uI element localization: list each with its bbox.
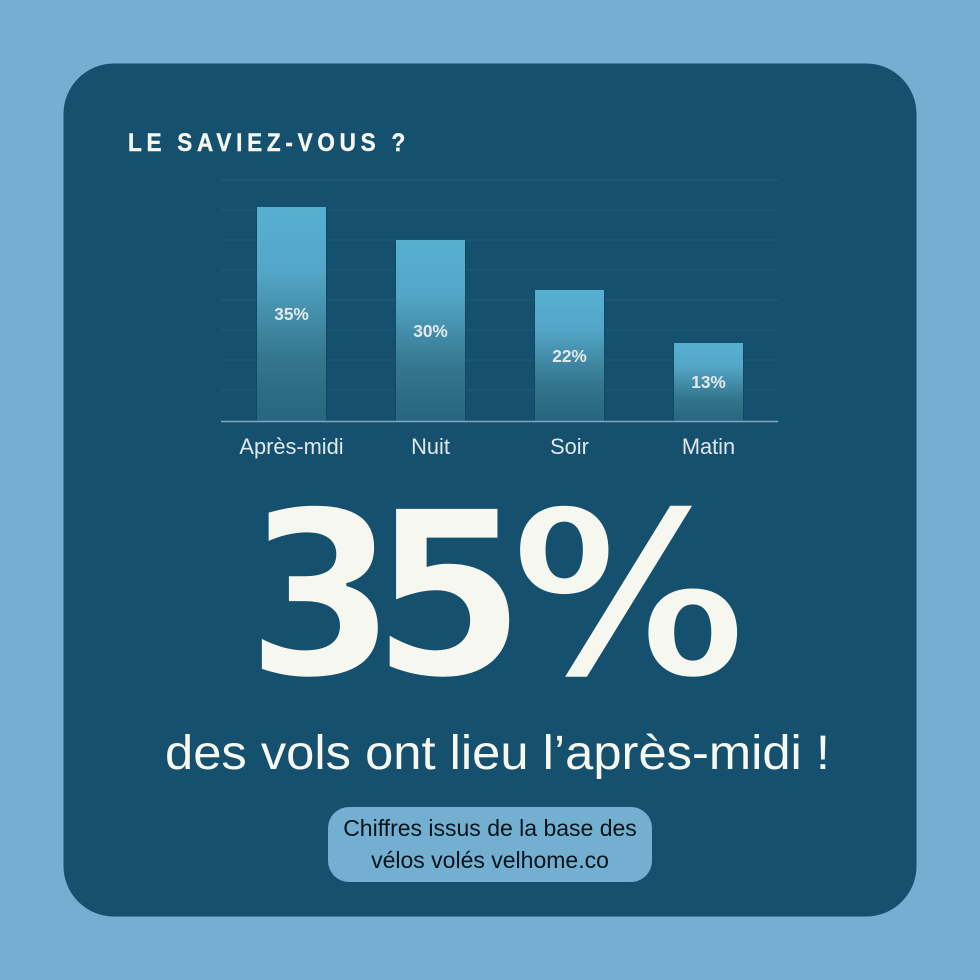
bar: après-midi 35%: 35% bbox=[274, 304, 309, 324]
bar: soir 22% bbox=[534, 290, 605, 421]
bar: nuit 30%: 30% bbox=[413, 321, 448, 341]
source callout: Chiffres issus de la base des bbox=[343, 815, 637, 841]
big number: % bbox=[511, 461, 746, 729]
bar: soir 22%: 22% bbox=[552, 346, 587, 366]
subtitle: des vols ont lieu l’après-midi ! bbox=[165, 727, 830, 780]
category labels: Matin bbox=[682, 434, 735, 459]
heading: le saviez-vous: LE SAVIEZ-VOUS ? bbox=[128, 129, 405, 157]
category labels: Après-midi bbox=[239, 434, 344, 459]
category labels bbox=[239, 434, 735, 459]
bar: matin 13%: 13% bbox=[691, 372, 726, 392]
chart baseline bbox=[221, 420, 778, 422]
category labels: Soir bbox=[550, 434, 589, 459]
bar: nuit 30% bbox=[395, 240, 466, 421]
bar chart bbox=[221, 180, 778, 459]
big number: 5 bbox=[371, 463, 526, 730]
source callout: vélos volés velhome.co bbox=[371, 847, 609, 873]
source callout bbox=[328, 807, 652, 882]
bar: matin 13% bbox=[673, 343, 744, 421]
panel: main card bbox=[64, 64, 916, 916]
big number bbox=[246, 461, 746, 730]
big number: 3 bbox=[246, 462, 396, 730]
bar: après-midi 35% bbox=[256, 207, 327, 421]
category labels: Nuit bbox=[411, 434, 450, 459]
